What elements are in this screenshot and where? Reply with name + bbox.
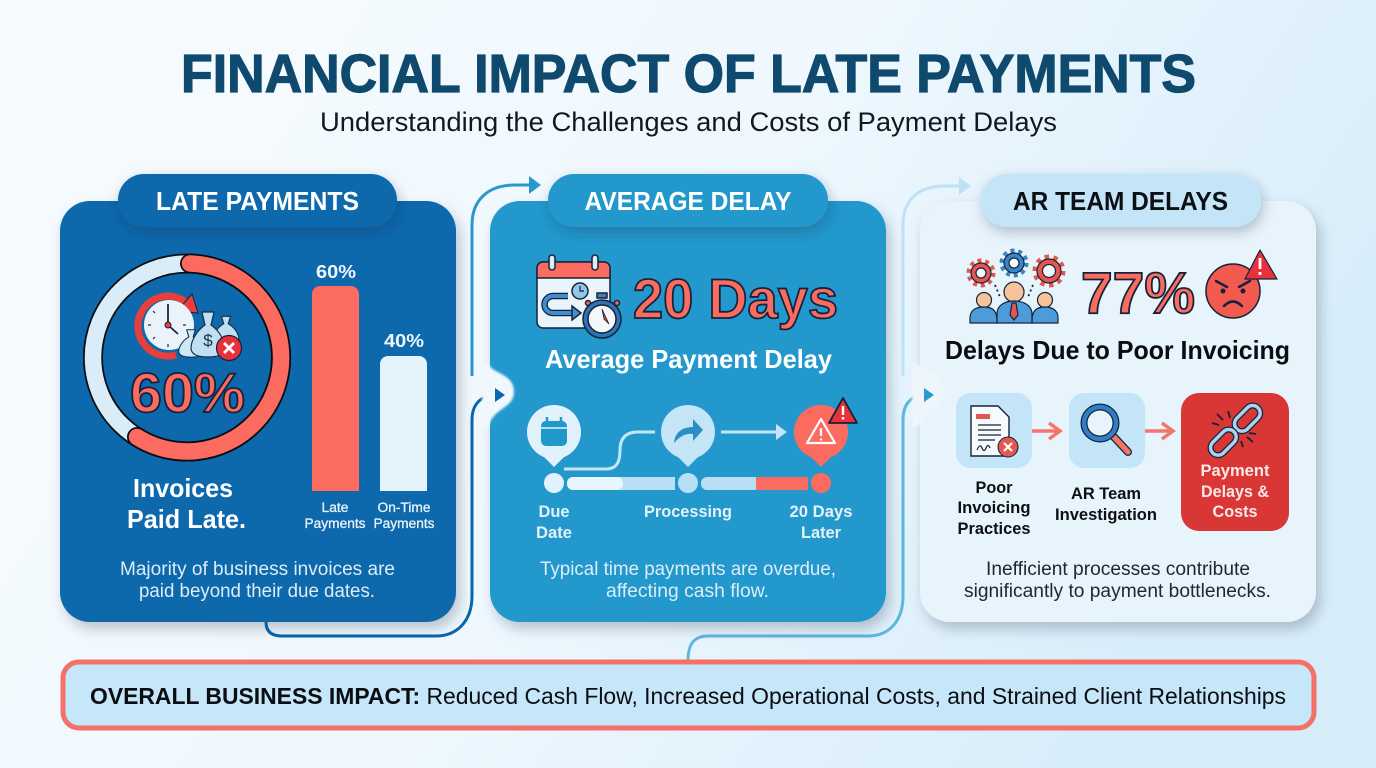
description: late payments: paid beyond their due dates.: [139, 581, 375, 602]
timeline labels: Due: [538, 502, 570, 521]
description: average delay: affecting cash flow.: [606, 581, 769, 602]
flow: AR team investigation: [1055, 393, 1157, 524]
callout: overall business impact: OVERALL BUSINESS IMPACT: Reduced Cash Flow, Increased Operational Costs, and Strained Client Relationships: [90, 683, 1286, 709]
bar chart: late vs on-time: 40%: [384, 331, 424, 351]
arrow: overall impact to AR team: [688, 388, 934, 660]
arrow: to payment delays: [1145, 423, 1173, 439]
heading: late payments: LATE PAYMENTS: [156, 186, 359, 216]
icon: angry face with warning: [1206, 250, 1277, 318]
description: AR team delays: Inefficient processes contribute: [986, 559, 1250, 580]
subtitle: Understanding the Challenges and Costs of Payment Delays: [320, 107, 1057, 137]
big stat: 77%: 77%: [1081, 261, 1195, 326]
label: invoices paid late: Invoices: [133, 473, 233, 503]
arrow: late payments to average delay (lower): [266, 388, 505, 636]
icon: team and gears: [968, 250, 1064, 323]
timeline labels: Date: [536, 523, 572, 542]
flow: payment delays and costs: Costs: [1212, 502, 1258, 521]
arrow: into average delay heading: [472, 176, 541, 376]
icon: calendar and stopwatch: [537, 255, 621, 338]
bar chart: late vs on-time: Payments: [304, 516, 366, 531]
bar chart: late vs on-time: [304, 262, 435, 531]
heading: AR team delays: [981, 174, 1261, 227]
icon: processing pin: [661, 405, 715, 467]
bar chart: late vs on-time: Payments: [374, 516, 435, 531]
description: AR team delays: [964, 559, 1271, 602]
heading: AR team delays: AR TEAM DELAYS: [1013, 186, 1228, 216]
flow: AR team investigation: Investigation: [1055, 505, 1157, 524]
flow: payment delays and costs: Delays &: [1201, 482, 1269, 501]
description: average delay: [540, 559, 836, 602]
title: FINANCIAL IMPACT OF LATE PAYMENTS: [181, 44, 1196, 104]
panel: average delay: [482, 174, 886, 622]
label: delays due to poor invoicing: Delays Due to Poor Invoicing: [945, 335, 1290, 365]
flow: poor invoicing practices: Poor: [976, 478, 1013, 497]
flow: payment delays and costs: [1181, 393, 1289, 531]
panel: AR team delays: [912, 174, 1316, 622]
arrow: to investigation: [1032, 423, 1060, 439]
icon: clock and money bags: $: [203, 331, 213, 350]
flow: poor invoicing practices: Practices: [958, 519, 1030, 538]
flow: poor invoicing practices: [956, 393, 1032, 538]
icon: due date pin: [527, 405, 581, 467]
timeline labels: Processing: [644, 502, 732, 521]
bar chart: late vs on-time: Late: [322, 500, 348, 515]
donut chart: 60 percent: [93, 264, 281, 452]
bar chart: late vs on-time: On-Time: [378, 500, 430, 515]
flow: poor invoicing practices: Invoicing: [958, 498, 1030, 517]
timeline: due date to 20 days later: [527, 398, 857, 542]
timeline labels: Later: [801, 523, 841, 542]
big stat: 60%: 60%: [130, 361, 245, 424]
label: average payment delay: Average Payment Delay: [545, 344, 833, 374]
arrow: into AR team heading: [903, 177, 971, 376]
panel: late payments: [60, 174, 456, 622]
timeline labels: 20 Days: [790, 502, 852, 521]
description: AR team delays: significantly to payment bottlenecks.: [964, 581, 1271, 602]
icon: clock and money bags: [138, 294, 242, 360]
bar chart: late vs on-time: 60%: [316, 262, 356, 282]
label: invoices paid late: [127, 473, 246, 534]
timeline labels: [536, 502, 852, 542]
callout: overall business impact: [63, 662, 1314, 728]
label: invoices paid late: Paid Late.: [127, 504, 246, 534]
description: late payments: Majority of business invoices are: [120, 559, 395, 580]
big stat: 20 days: 20 Days: [633, 267, 838, 330]
flow: AR team investigation: AR Team: [1071, 484, 1141, 503]
flow: payment delays and costs: Payment: [1200, 461, 1270, 480]
heading: average delay: [548, 174, 828, 227]
heading: average delay: AVERAGE DELAY: [584, 186, 792, 216]
icon: 20 days later warning pin: [794, 398, 857, 467]
heading: late payments: [118, 174, 397, 227]
description: average delay: Typical time payments are overdue,: [540, 559, 836, 580]
description: late payments: [120, 559, 395, 602]
